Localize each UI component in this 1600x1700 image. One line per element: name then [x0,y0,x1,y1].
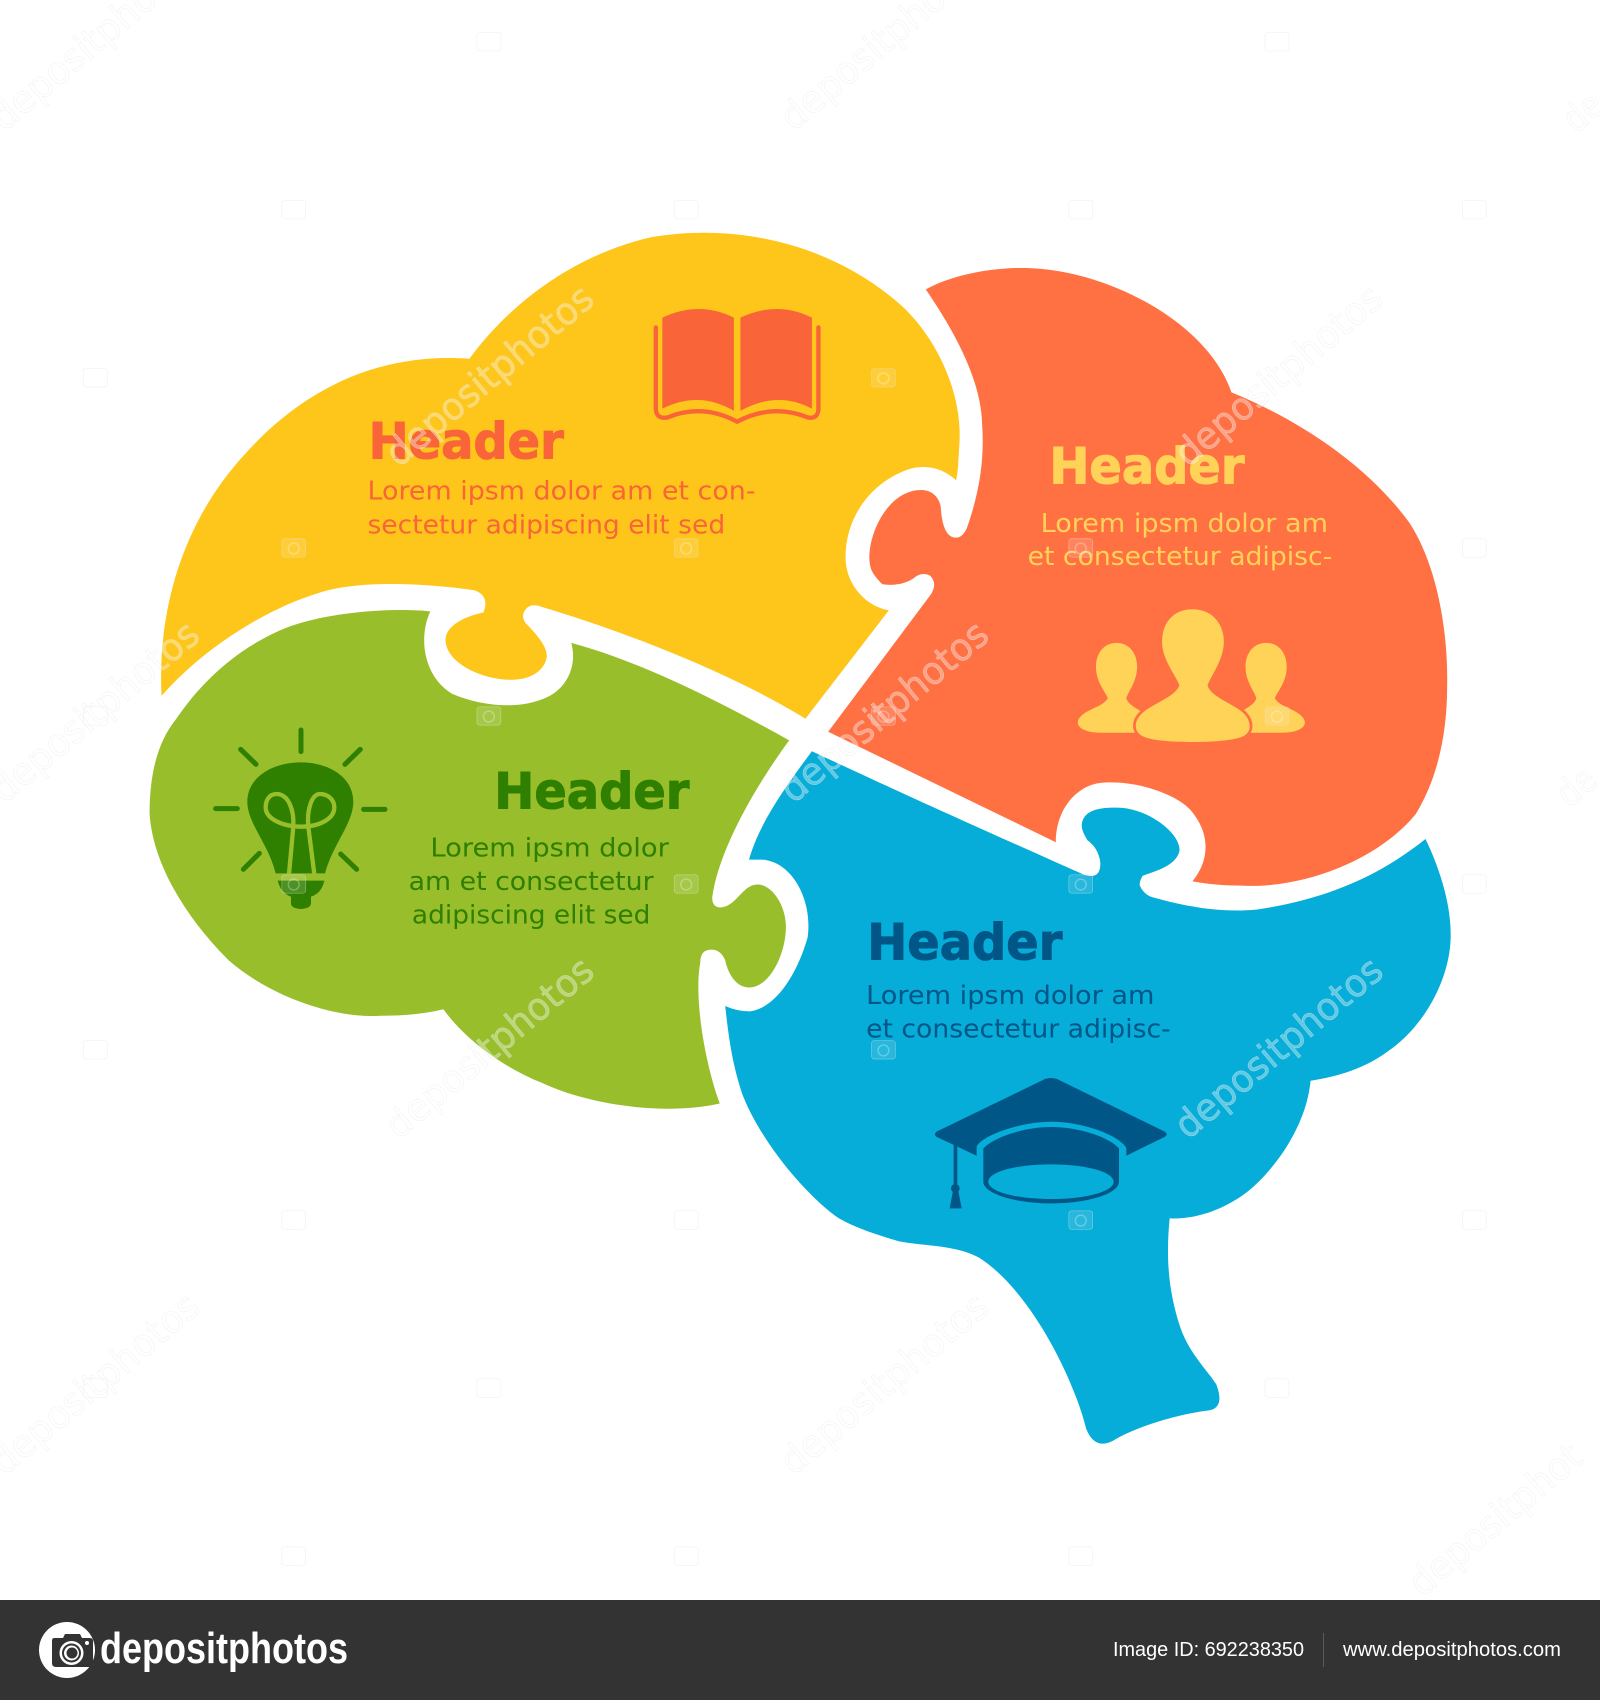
yellow body text [367,477,756,540]
watermark overlay: depositphotos [1166,276,1391,475]
watermark overlay: depositphotos [771,612,997,811]
blue body text [866,981,1171,1044]
icon: depositphotos logo [39,1622,95,1678]
blue body text: Lorem ipsm dolor am [866,981,1154,1011]
yellow puzzle piece [161,233,960,719]
green body text: Lorem ipsm dolor [430,833,669,863]
orange body text [1028,509,1332,572]
watermark overlay: depositphotos [376,276,602,475]
orange header: Header [1049,437,1245,495]
icon: people [1078,609,1305,742]
icon: graduation cap [935,1078,1167,1208]
watermark overlay: depositphotos [376,948,602,1147]
blue header: Header [867,913,1063,971]
panel: orange [828,268,1447,886]
yellow header: Header [369,413,564,471]
icon: open book [656,309,818,422]
footer bar [0,1600,1600,1700]
green body text: am et consectetur [409,867,654,897]
panel: green [150,610,789,1109]
yellow body text: sectetur adipiscing elit sed [367,510,725,540]
orange body text: Lorem ipsm dolor am [1041,509,1328,539]
watermark overlay: depositphot [1400,1434,1591,1605]
icon: light bulb [216,730,385,909]
blue puzzle piece [725,751,1451,1444]
green puzzle piece [150,610,789,1109]
panel: blue [725,751,1451,1444]
orange puzzle piece [828,268,1447,886]
green body text: adipiscing elit sed [412,901,650,931]
watermark overlay: depositphotos [1166,948,1391,1147]
watermark camera marks [83,33,1486,1565]
yellow body text: Lorem ipsm dolor am et con- [367,477,756,507]
orange body text: et consectetur adipisc- [1028,542,1332,572]
green body text [409,833,669,931]
website url: www.depositphotos.com [1342,1639,1561,1661]
logo wordmark: depositphotos [100,1624,348,1673]
panel: yellow [161,233,960,719]
blue body text: et consectetur adipisc- [866,1014,1171,1044]
image id: Image ID: 692238350 [1113,1639,1304,1661]
green header: Header [494,763,690,821]
watermark overlay: depositphotos [771,1284,997,1483]
